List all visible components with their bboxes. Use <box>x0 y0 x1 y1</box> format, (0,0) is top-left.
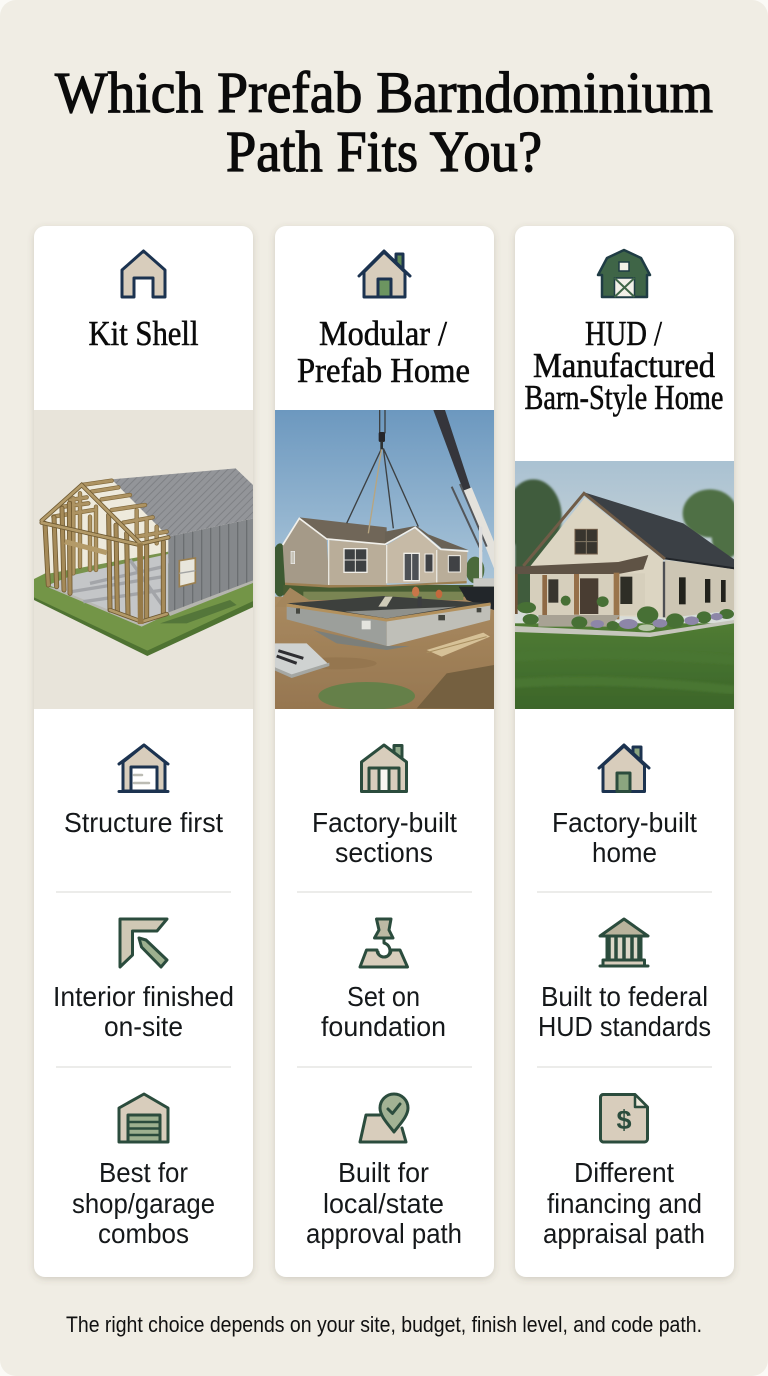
label <box>552 807 697 868</box>
label <box>321 981 446 1042</box>
interior behind frame <box>50 572 60 574</box>
icon: document with dollar sign <box>600 1094 648 1142</box>
label <box>72 1157 215 1249</box>
label: Best for <box>99 1157 188 1188</box>
feature: different financing and appraisal path <box>543 1094 705 1249</box>
lawn <box>513 623 737 711</box>
feature: built to federal hud standards <box>538 919 711 1042</box>
icon: kit house <box>122 251 165 297</box>
ground base <box>34 597 253 656</box>
icon: crane hook over foundation <box>360 919 408 967</box>
heading: modular prefab home: Modular / <box>319 314 447 353</box>
icon: corner and pencil <box>120 919 167 967</box>
title: Path Fits You? <box>226 119 542 184</box>
roof <box>585 493 735 569</box>
icon: house with chimney <box>359 251 410 297</box>
label: shop/garage <box>72 1188 215 1219</box>
tree line <box>275 543 285 597</box>
icon: house with green door <box>599 745 649 792</box>
lumber stack <box>427 633 490 657</box>
card background: modular <box>275 226 494 1277</box>
label: sections <box>335 837 433 868</box>
label: Built for <box>338 1157 429 1188</box>
icon: garage <box>119 1094 168 1142</box>
lifting cables and hook <box>347 410 418 533</box>
icon: document with dollar sign: $ <box>616 1105 632 1135</box>
title <box>55 60 713 184</box>
label: Set on <box>347 981 420 1012</box>
timber frame <box>42 481 168 622</box>
feature: interior finished on-site <box>53 919 234 1042</box>
label: approval path <box>306 1218 462 1249</box>
label: local/state <box>323 1188 444 1219</box>
side wall <box>665 560 735 618</box>
illustration: kit shell frame and metal building <box>34 410 254 709</box>
label: Different <box>574 1157 674 1188</box>
label: Interior finished <box>53 981 234 1012</box>
icon: garage house <box>119 745 168 792</box>
heading: hud manufactured barn-style home <box>524 314 724 417</box>
crane <box>433 410 471 491</box>
side windows <box>679 577 686 604</box>
heading: kit shell: Kit Shell <box>88 314 199 353</box>
title: Which Prefab Barndominium <box>55 60 713 125</box>
label: appraisal path <box>543 1218 705 1249</box>
feature: structure first <box>64 745 223 838</box>
label <box>543 1157 705 1249</box>
label: HUD standards <box>538 1011 711 1042</box>
heading: modular prefab home: Prefab Home <box>297 351 470 390</box>
gable wall <box>530 497 663 617</box>
metal wall <box>168 518 254 613</box>
heading: hud manufactured barn-style home: Barn-Style Home <box>524 378 724 417</box>
feature: factory-built home <box>552 745 697 868</box>
card background: hud <box>515 226 734 1277</box>
heading: hud manufactured barn-style home: HUD / <box>585 314 662 353</box>
label <box>306 1157 462 1249</box>
photo: barn-style home with lawn <box>505 460 742 711</box>
footer note: The right choice depends on your site, budget, finish level, and code path. <box>66 1312 702 1337</box>
card background: kit shell <box>34 226 253 1277</box>
modular house <box>283 518 329 585</box>
feature: set on foundation <box>321 919 446 1042</box>
label: Factory-built <box>312 807 457 838</box>
label: financing and <box>547 1188 702 1219</box>
label: Built to federal <box>541 981 708 1012</box>
porch <box>532 614 568 615</box>
upper window <box>575 529 597 554</box>
icon: map pin with check <box>360 1094 408 1142</box>
icon: government building <box>600 919 648 966</box>
label <box>312 807 457 868</box>
icon: barn <box>598 250 650 297</box>
label: home <box>592 837 657 868</box>
bushes and flowers <box>517 596 734 630</box>
sign board on ground <box>275 643 329 678</box>
ground <box>273 597 497 710</box>
heading: modular prefab home <box>297 314 470 390</box>
trees <box>515 478 564 606</box>
window <box>179 558 195 587</box>
label: foundation <box>321 1011 446 1042</box>
photo: modular home lifted by crane <box>271 410 497 710</box>
label: Structure first <box>64 807 223 838</box>
panel: modular prefab home <box>271 226 497 1277</box>
label: on-site <box>104 1011 183 1042</box>
label: combos <box>98 1218 189 1249</box>
panel: kit shell <box>34 226 254 1277</box>
panel: hud manufactured barn-style home <box>505 226 742 1277</box>
label <box>538 981 711 1042</box>
feature: best for shop/garage combos <box>72 1094 215 1249</box>
label: Factory-built <box>552 807 697 838</box>
label <box>53 981 234 1042</box>
heading: hud manufactured barn-style home: Manufactured <box>533 346 715 385</box>
feature: built for local/state approval path <box>306 1094 462 1249</box>
foundation <box>287 596 491 620</box>
workers <box>412 587 419 597</box>
metal roof <box>112 468 254 537</box>
icon: house with french doors <box>362 745 406 792</box>
porch steps and walk <box>538 615 620 627</box>
feature: factory-built sections <box>312 745 457 868</box>
